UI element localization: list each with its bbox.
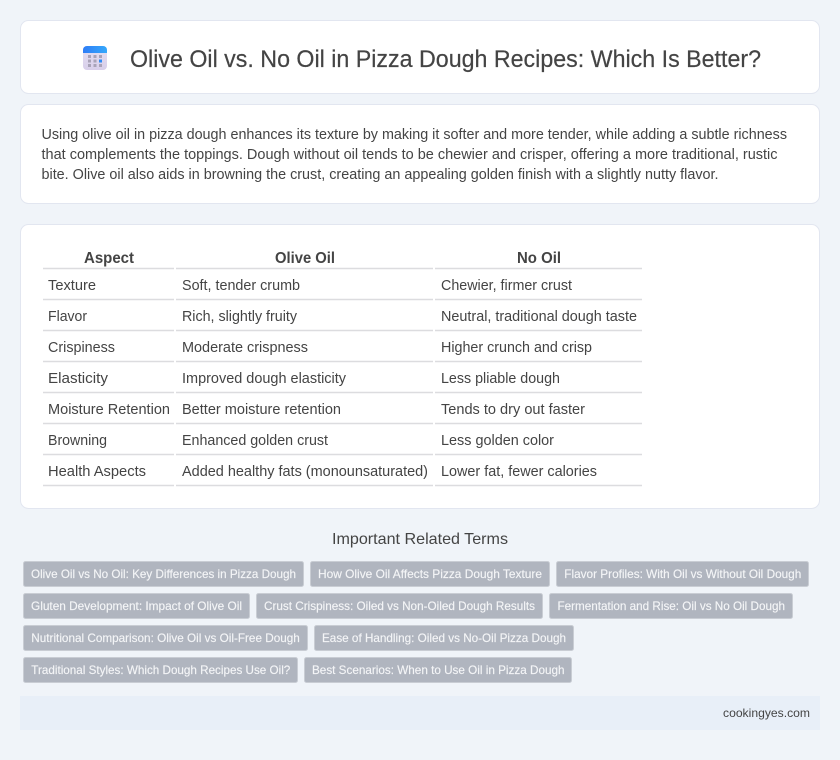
panel: intro paragraph	[20, 104, 820, 204]
row: crispiness: Crispiness	[48, 340, 115, 356]
row: texture	[43, 278, 642, 300]
row: browning	[43, 433, 642, 454]
row: elasticity: Elasticity	[48, 371, 109, 387]
row: elasticity: Improved dough elasticity	[182, 371, 347, 387]
row: elasticity	[43, 371, 642, 392]
tag: Crust Crispiness: Oiled vs Non-Oiled Dough Results	[264, 599, 535, 613]
row: browning: Enhanced golden crust	[182, 433, 328, 449]
tag: Gluten Development: Impact of Olive Oil	[31, 599, 242, 613]
tag	[24, 594, 250, 618]
table header	[43, 250, 642, 268]
row: health aspects: Lower fat, fewer calories	[441, 464, 597, 480]
heading: important related terms: Important Related Terms	[332, 531, 508, 548]
row: flavor: Rich, slightly fruity	[182, 309, 298, 325]
tag	[304, 658, 572, 682]
row: flavor	[43, 309, 642, 330]
panel: intro paragraph: Using olive oil in pizza dough enhances its texture by making it softer and more tender, while adding a subtle richness	[42, 127, 787, 143]
tag	[24, 562, 304, 586]
tag: How Olive Oil Affects Pizza Dough Texture	[318, 567, 542, 581]
tag	[550, 594, 792, 618]
tag	[314, 626, 574, 650]
row: health aspects: Added healthy fats (monounsaturated)	[182, 464, 428, 480]
row: texture: Chewier, firmer crust	[441, 278, 572, 294]
tag	[556, 562, 808, 586]
title text: Olive Oil vs. No Oil in Pizza Dough Recipes: Which Is Better?	[130, 46, 761, 73]
tag	[256, 594, 542, 618]
row: moisture retention: Better moisture retention	[182, 402, 341, 418]
tag	[24, 658, 298, 682]
row: crispiness: Higher crunch and crisp	[441, 340, 592, 356]
row: flavor: Flavor	[48, 309, 87, 325]
tag: Nutritional Comparison: Olive Oil vs Oil-Free Dough	[31, 631, 300, 645]
table header: No Oil	[517, 250, 561, 267]
panel: intro paragraph: bite. Olive oil also aids in browning the crust, creating an appealing golden finish with a slightly nutty flavor.	[42, 167, 718, 183]
row: moisture retention: Tends to dry out faster	[441, 402, 585, 418]
row: browning: Browning	[48, 433, 107, 449]
tag	[24, 626, 308, 650]
tag: Ease of Handling: Oiled vs No-Oil Pizza Dough	[322, 631, 566, 645]
row: moisture retention: Moisture Retention	[48, 402, 170, 418]
table header: Aspect	[84, 250, 135, 267]
tag: Traditional Styles: Which Dough Recipes Use Oil?	[31, 663, 291, 677]
row: health aspects	[43, 464, 642, 486]
panel: comparison table	[20, 224, 820, 508]
row: texture: Texture	[48, 278, 96, 294]
row: elasticity: Less pliable dough	[441, 371, 560, 387]
row: crispiness: Moderate crispness	[182, 340, 308, 356]
footer: cookingyes.com	[723, 706, 810, 720]
table header: Olive Oil	[275, 250, 335, 267]
tag: Best Scenarios: When to Use Oil in Pizza Dough	[312, 663, 564, 677]
row: health aspects: Health Aspects	[48, 464, 146, 480]
icon: calendar	[83, 46, 107, 70]
row: moisture retention	[43, 402, 642, 424]
tag: Flavor Profiles: With Oil vs Without Oil Dough	[564, 567, 801, 581]
row: texture: Soft, tender crumb	[182, 278, 300, 294]
footer	[20, 696, 820, 730]
tag: Olive Oil vs No Oil: Key Differences in Pizza Dough	[31, 567, 296, 581]
related term tags	[24, 562, 808, 682]
panel: intro paragraph: that complements the toppings. Dough without oil tends to be chewier and crisper, offering a more traditional, rustic	[42, 147, 778, 163]
panel: title	[20, 20, 820, 94]
row: crispiness	[43, 340, 642, 362]
tag	[310, 562, 550, 586]
row: flavor: Neutral, traditional dough taste	[441, 309, 637, 325]
tag: Fermentation and Rise: Oil vs No Oil Dough	[558, 599, 785, 613]
row: browning: Less golden color	[441, 433, 554, 449]
